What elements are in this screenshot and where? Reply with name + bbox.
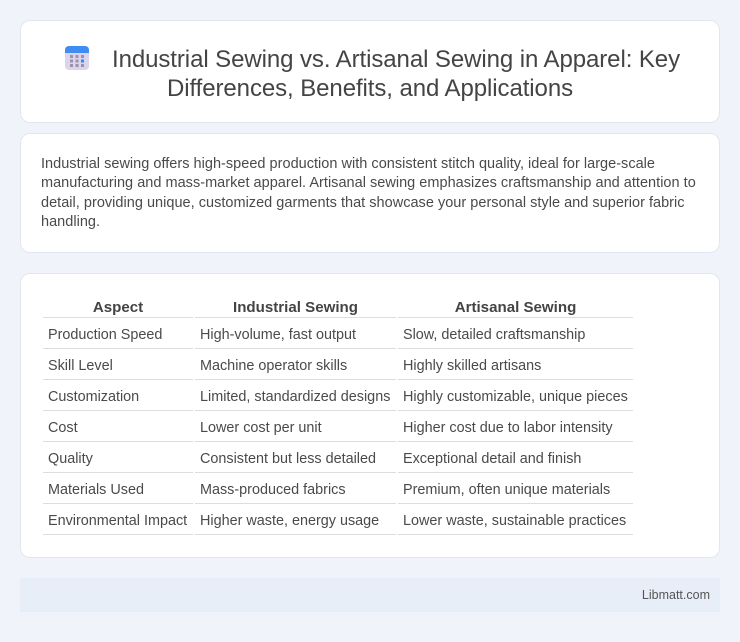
summary text: detail, providing unique, customized garments that showcase your personal style and superior fabric — [41, 195, 685, 211]
row: environmental impact — [48, 513, 626, 529]
row: environmental impact: Environmental Impact — [48, 513, 187, 529]
row: customization: Highly customizable, unique pieces — [403, 389, 628, 405]
column headers: Aspect — [93, 298, 143, 316]
summary text: handling. — [41, 214, 100, 230]
title: Industrial Sewing vs. Artisanal Sewing in Apparel: Key — [112, 46, 680, 73]
column headers: Artisanal Sewing — [455, 298, 576, 316]
title — [112, 46, 680, 102]
row: materials used: Mass-produced fabrics — [200, 482, 346, 498]
summary text: manufacturing and mass-market apparel. Artisanal sewing emphasizes craftsmanship and attention to — [41, 175, 696, 191]
row: customization: Limited, standardized designs — [200, 389, 390, 405]
row: cost: Cost — [48, 420, 78, 436]
row: materials used: Premium, often unique materials — [403, 482, 610, 498]
row: environmental impact: Higher waste, energy usage — [200, 513, 379, 529]
row: skill level: Highly skilled artisans — [403, 358, 541, 374]
row: materials used: Materials Used — [48, 482, 144, 498]
row: production speed — [48, 327, 585, 343]
summary panel — [20, 133, 720, 253]
row: production speed: High-volume, fast output — [200, 327, 356, 343]
row: production speed: Production Speed — [48, 327, 162, 343]
row: cost: Lower cost per unit — [200, 420, 322, 436]
row: cost — [48, 420, 613, 436]
footer bar — [20, 578, 720, 612]
icon: calendar — [65, 46, 89, 70]
row: customization — [48, 389, 628, 405]
row: materials used — [48, 482, 610, 498]
column headers — [93, 298, 576, 316]
header panel — [20, 20, 720, 123]
row: production speed: Slow, detailed craftsmanship — [403, 327, 585, 343]
row: quality: Exceptional detail and finish — [403, 451, 581, 467]
row: quality: Consistent but less detailed — [200, 451, 376, 467]
row: quality: Quality — [48, 451, 93, 467]
row: skill level — [48, 358, 541, 374]
row: skill level: Machine operator skills — [200, 358, 347, 374]
column headers: Industrial Sewing — [233, 298, 358, 316]
table panel — [20, 273, 720, 558]
summary text: Industrial sewing offers high-speed production with consistent stitch quality, ideal for large-scale — [41, 156, 655, 172]
summary text — [41, 156, 696, 230]
title: Differences, Benefits, and Applications — [167, 75, 573, 102]
row: quality — [48, 451, 581, 467]
footer text: Libmatt.com — [642, 588, 710, 602]
row: customization: Customization — [48, 389, 139, 405]
row: cost: Higher cost due to labor intensity — [403, 420, 613, 436]
row: skill level: Skill Level — [48, 358, 113, 374]
row: environmental impact: Lower waste, sustainable practices — [403, 513, 626, 529]
